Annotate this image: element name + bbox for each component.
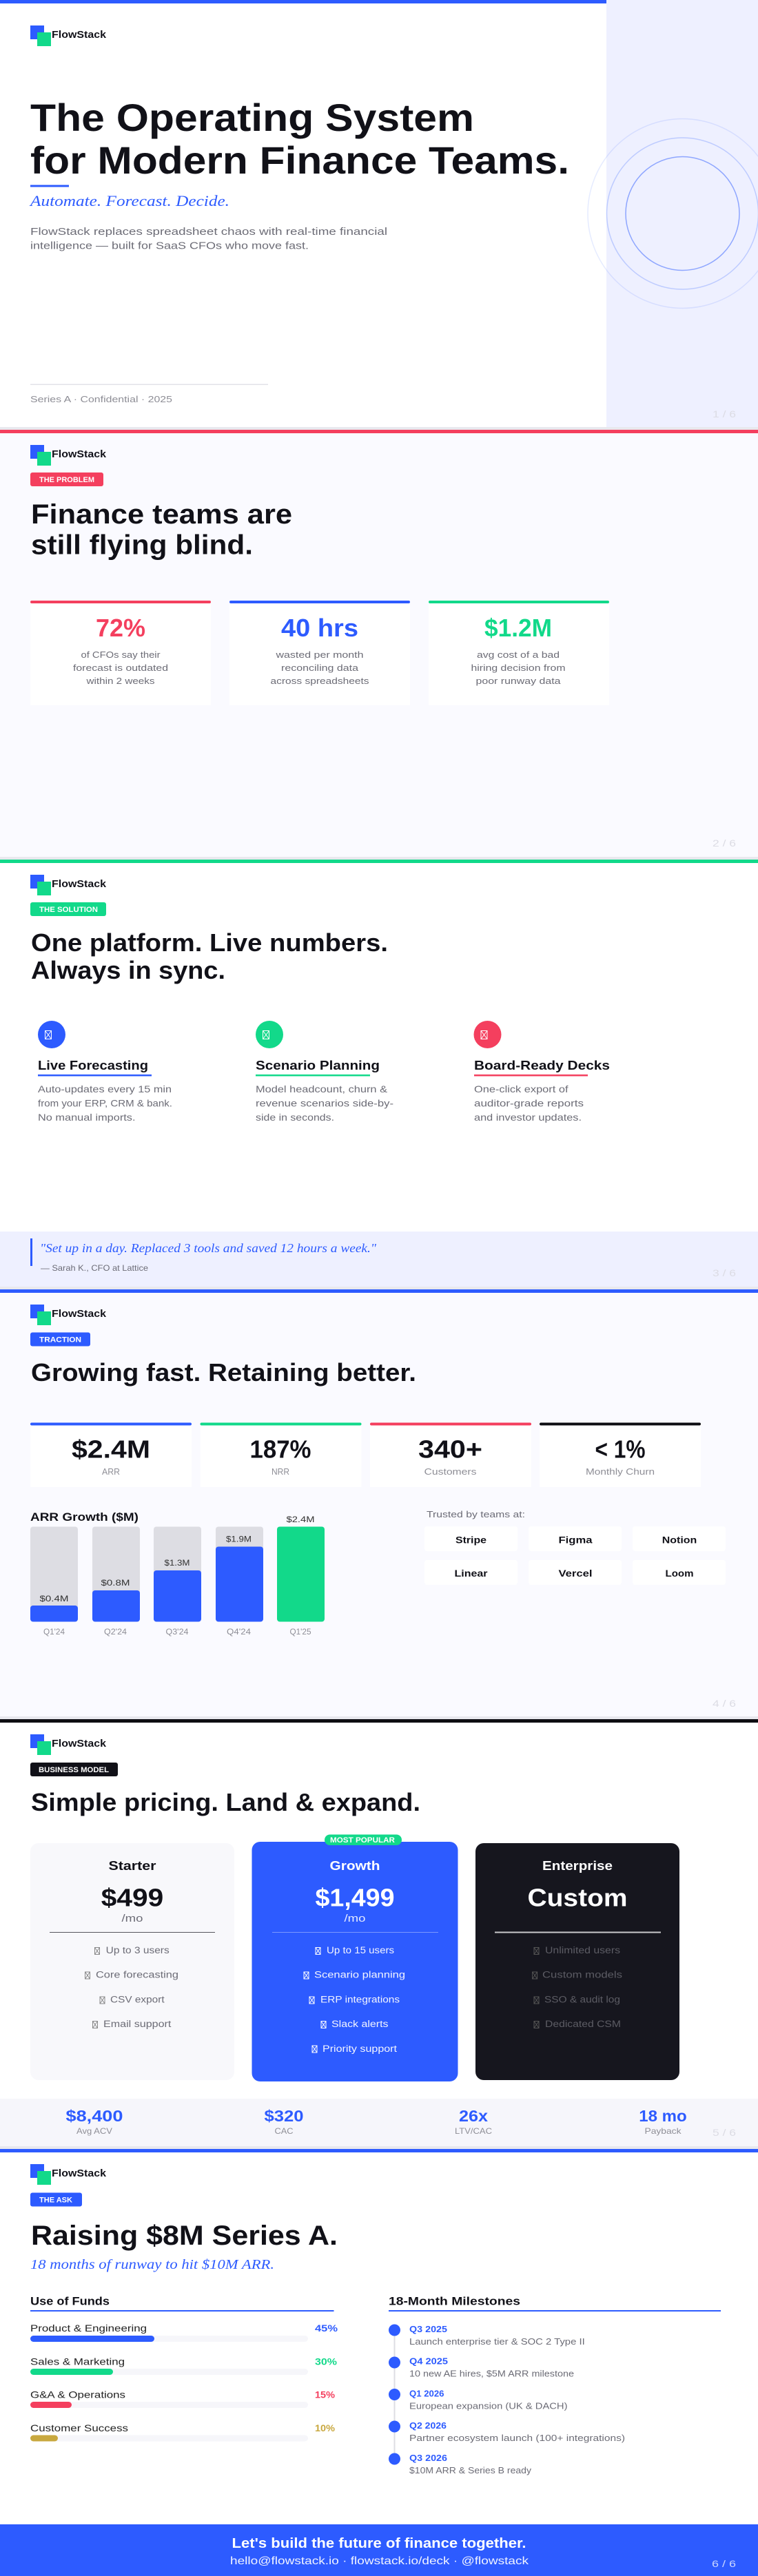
logo tile: Stripe: Stripe	[455, 1535, 486, 1546]
feature: scenario planning	[256, 1021, 393, 1123]
pricing card: starter: Core forecasting	[96, 1970, 178, 1980]
tag	[30, 902, 106, 916]
bar: Q2'24	[92, 1526, 140, 1637]
testimonial band: — Sarah K., CFO at Lattice	[41, 1263, 148, 1273]
feature: live forecasting: from your ERP, CRM & bank.	[38, 1098, 172, 1109]
description	[30, 226, 387, 252]
stat card: $1.2M	[429, 601, 609, 705]
bar: Q4'24: Q4'24	[227, 1627, 251, 1637]
logo: FlowStack	[52, 1308, 107, 1320]
stat card: $1.2M: hiring decision from	[471, 663, 565, 673]
feature: live forecasting: Auto-updates every 15 min	[38, 1083, 172, 1094]
metric: payback: Payback	[645, 2126, 682, 2136]
logo tile: Stripe	[424, 1526, 518, 1551]
feature: scenario planning: Scenario Planning	[256, 1059, 380, 1072]
pricing card: growth: Slack alerts	[331, 2019, 389, 2029]
bar: Q1'25: $2.4M	[287, 1515, 314, 1524]
milestone: Q4 2025: 10 new AE hires, $5M ARR milestone	[409, 2369, 574, 2379]
headline: Finance teams are	[31, 499, 292, 530]
funds row: product and engineering	[30, 2323, 338, 2342]
pricing card: enterprise: Dedicated CSM	[545, 2019, 621, 2029]
stat card: 72%	[30, 601, 211, 705]
description: intelligence — built for SaaS CFOs who move fast.	[30, 240, 309, 252]
logo: FlowStack	[52, 29, 107, 41]
feature: scenario planning: side in seconds.	[256, 1112, 334, 1123]
slide 1: cover	[0, 0, 758, 427]
call to action footer: hello@flowstack.io · flowstack.io/deck · @flowstack	[230, 2555, 529, 2567]
call to action footer	[0, 2524, 758, 2576]
stat card: 40 hrs: across spreadsheets	[270, 676, 369, 686]
pricing card: starter: /mo	[121, 1913, 143, 1924]
pricing card: enterprise: Unlimited users	[545, 1945, 620, 1955]
logo	[30, 1305, 107, 1325]
tag: THE PROBLEM	[39, 476, 94, 484]
bar: Q3'24: $1.3M	[164, 1558, 190, 1568]
tag	[30, 1763, 118, 1776]
pricing card: starter: Email support	[103, 2019, 172, 2029]
KPI card: NRR: NRR	[272, 1466, 289, 1477]
milestone: Q4 2025: Q4 2025	[409, 2356, 448, 2367]
feature: scenario planning: revenue scenarios side-by-	[256, 1098, 393, 1109]
funds row: product and engineering: Product & Engineering	[30, 2323, 147, 2334]
title: for Modern Finance Teams.	[30, 138, 569, 182]
pricing card: enterprise: Custom models	[542, 1970, 622, 1980]
logo: FlowStack	[52, 1738, 107, 1749]
bar: Q2'24: $0.8M	[101, 1578, 130, 1588]
right side panel	[606, 0, 758, 427]
metric: LTV/CAC: 26x	[459, 2107, 488, 2125]
page number: 3 / 6	[713, 1267, 736, 1278]
trusted by label: Trusted by teams at:	[427, 1509, 525, 1519]
stat card: 40 hrs: 40 hrs	[281, 614, 358, 642]
milestone: Q2 2026	[389, 2420, 625, 2453]
funds row: customer success: Customer Success	[30, 2422, 128, 2433]
logo	[30, 875, 107, 895]
funds row: G&A and operations: G&A & Operations	[30, 2389, 125, 2400]
pricing card: starter	[30, 1843, 234, 2080]
tag: BUSINESS MODEL	[39, 1766, 109, 1774]
testimonial band: "Set up in a day. Replaced 3 tools and saved 12 hours a week."	[40, 1241, 376, 1255]
KPI card: customers	[370, 1423, 531, 1487]
page number: 6 / 6	[712, 2558, 736, 2569]
stat card: $1.2M: $1.2M	[484, 614, 552, 642]
pricing card: growth	[252, 1835, 458, 2081]
title: The Operating System	[30, 96, 474, 139]
KPI card: ARR	[30, 1423, 192, 1487]
stat card: 40 hrs: reconciling data	[281, 663, 359, 673]
pricing card: growth: $1,499	[316, 1883, 394, 1912]
milestone: Q1 2026	[389, 2388, 568, 2422]
bar: Q1'24: $0.4M	[40, 1594, 69, 1603]
slide 4: traction	[0, 1289, 758, 1716]
tag	[30, 1332, 90, 1346]
testimonial band	[0, 1232, 758, 1287]
customer logo grid	[424, 1509, 726, 1585]
metric: LTV/CAC: LTV/CAC	[455, 2126, 492, 2136]
stat card: 72%: 72%	[96, 614, 145, 642]
pricing card: enterprise	[475, 1843, 679, 2080]
page number: 2 / 6	[713, 838, 736, 849]
most popular badge	[325, 1835, 402, 1845]
KPI card: customers: Customers	[424, 1466, 477, 1477]
milestone: Q3 2026	[389, 2453, 532, 2475]
KPI card: NRR: 187%	[249, 1435, 311, 1463]
section heading: 18-Month Milestones	[389, 2295, 520, 2307]
tag	[30, 472, 103, 486]
page number: 4 / 6	[713, 1698, 736, 1709]
tag: TRACTION	[39, 1336, 81, 1344]
headline: Always in sync.	[31, 956, 225, 984]
KPI card: ARR: ARR	[102, 1466, 120, 1477]
funds row: G&A and operations	[30, 2389, 336, 2408]
KPI card: customers: 340+	[418, 1435, 482, 1463]
pricing card: enterprise: SSO & audit log	[544, 1995, 620, 2004]
milestone: Q3 2025	[389, 2324, 585, 2357]
logo	[30, 2164, 107, 2185]
page number: 1 / 6	[713, 408, 736, 419]
bar: Q3'24: Q3'24	[165, 1627, 189, 1637]
feature: board-ready decks	[474, 1021, 610, 1123]
logo: FlowStack	[52, 2168, 107, 2179]
metric: payback: 18 mo	[639, 2107, 687, 2125]
funds row: G&A and operations: 15%	[315, 2389, 336, 2400]
pricing card: enterprise: Custom	[528, 1883, 627, 1912]
milestones timeline	[389, 2295, 721, 2475]
chart title: ARR Growth ($M)	[30, 1510, 139, 1524]
bar: Q1'24: Q1'24	[43, 1627, 65, 1637]
metric: LTV/CAC	[455, 2107, 492, 2136]
feature: live forecasting	[38, 1021, 172, 1123]
headline: Simple pricing. Land & expand.	[31, 1788, 420, 1816]
funds row: product and engineering: 45%	[315, 2323, 338, 2334]
feature: live forecasting: Live Forecasting	[38, 1059, 148, 1072]
milestone: Q2 2026: Partner ecosystem launch (100+ integrations)	[409, 2433, 625, 2443]
stat card: 72%: of CFOs say their	[81, 650, 161, 660]
section heading: Use of Funds	[30, 2295, 110, 2307]
feature: board-ready decks: One-click export of	[474, 1083, 568, 1094]
metric: CAC	[265, 2107, 303, 2136]
logo tile: Vercel	[529, 1560, 622, 1585]
feature: board-ready decks: and investor updates.	[474, 1112, 582, 1123]
KPI card: ARR: $2.4M	[72, 1435, 150, 1463]
pricing card: starter: CSV export	[110, 1995, 165, 2004]
headline	[31, 928, 388, 984]
pricing card: starter: Starter	[109, 1859, 156, 1873]
feature: live forecasting: No manual imports.	[38, 1112, 135, 1123]
headline: still flying blind.	[31, 530, 253, 561]
accent line	[30, 185, 69, 187]
logo tile: Linear	[424, 1560, 518, 1585]
milestone: Q1 2026: European expansion (UK & DACH)	[409, 2400, 568, 2411]
bar: Q1'25: Q1'25	[289, 1627, 311, 1637]
pricing card: growth: Up to 15 users	[327, 1945, 394, 1955]
logo tile: Loom	[633, 1560, 726, 1585]
logo: FlowStack	[52, 878, 107, 890]
pricing card: growth: Growth	[329, 1859, 380, 1873]
title	[30, 96, 569, 182]
pricing card: growth: Priority support	[322, 2044, 397, 2054]
footer meta: Series A · Confidential · 2025	[30, 394, 172, 404]
use of funds section	[30, 2295, 338, 2441]
metric: CAC: CAC	[274, 2126, 294, 2136]
feature: board-ready decks: Board-Ready Decks	[474, 1059, 610, 1072]
milestone: Q3 2025: Launch enterprise tier & SOC 2 Type II	[409, 2336, 585, 2347]
logo tile: Notion: Notion	[662, 1535, 697, 1546]
metric: payback	[639, 2107, 687, 2136]
logo tile: Linear: Linear	[455, 1568, 488, 1579]
logo tile: Figma: Figma	[558, 1535, 593, 1546]
pricing card: enterprise: Enterprise	[542, 1859, 613, 1873]
slide 6: the ask	[0, 2149, 758, 2576]
logo tile: Loom: Loom	[666, 1568, 693, 1579]
funds row: customer success: 10%	[315, 2422, 336, 2433]
feature: board-ready decks: auditor-grade reports	[474, 1098, 584, 1109]
stat card: 40 hrs: wasted per month	[275, 650, 364, 660]
pricing card: growth: Scenario planning	[314, 1970, 405, 1980]
tagline: Automate. Forecast. Decide.	[29, 192, 229, 209]
milestone: Q2 2026: Q2 2026	[409, 2420, 447, 2431]
tag: THE SOLUTION	[39, 906, 98, 914]
headline: One platform. Live numbers.	[31, 928, 388, 957]
feature: scenario planning: Model headcount, churn &	[256, 1083, 388, 1094]
stat card: 40 hrs	[229, 601, 410, 705]
concentric circles decoration	[588, 118, 758, 309]
stat card: 72%: within 2 weeks	[85, 676, 155, 686]
metric: ACV	[66, 2107, 123, 2136]
bar: Q3'24	[154, 1526, 201, 1637]
headline: Growing fast. Retaining better.	[31, 1358, 416, 1386]
slide 5: business model	[0, 1719, 758, 2146]
funds row: sales and marketing: 30%	[315, 2356, 338, 2367]
logo	[30, 1734, 107, 1755]
metric: CAC: $320	[265, 2107, 303, 2125]
call to action footer: Let's build the future of finance together.	[232, 2536, 526, 2551]
unit economics band	[0, 2099, 758, 2146]
stat card: $1.2M: poor runway data	[475, 676, 561, 686]
pricing card: growth: ERP integrations	[320, 1995, 400, 2004]
bar: Q2'24: Q2'24	[104, 1627, 127, 1637]
logo tile: Notion	[633, 1526, 726, 1551]
funds row: sales and marketing: Sales & Marketing	[30, 2356, 125, 2367]
bar: Q1'24	[30, 1526, 78, 1637]
subtitle: 18 months of runway to hit $10M ARR.	[30, 2257, 274, 2272]
ARR growth bar chart	[30, 1510, 325, 1637]
slide 3: the solution	[0, 860, 758, 1287]
funds row: sales and marketing	[30, 2356, 338, 2375]
metric: ACV: $8,400	[66, 2107, 123, 2125]
logo: FlowStack	[52, 448, 107, 460]
pricing card: growth: /mo	[345, 1913, 365, 1924]
logo tile: Vercel: Vercel	[558, 1568, 593, 1579]
description: FlowStack replaces spreadsheet chaos with real-time financial	[30, 226, 387, 238]
tag: THE ASK	[39, 2196, 72, 2204]
logo tile: Figma	[529, 1526, 622, 1551]
footer divider	[30, 384, 268, 385]
metric: ACV: Avg ACV	[76, 2126, 112, 2136]
bar: Q4'24	[216, 1526, 263, 1637]
pricing card: starter: $499	[101, 1883, 163, 1912]
logo	[30, 25, 107, 46]
KPI card: churn: < 1%	[595, 1435, 645, 1463]
slide 2: the problem	[0, 430, 758, 857]
tag	[30, 2193, 82, 2207]
headline	[31, 499, 292, 561]
KPI card: churn	[540, 1423, 701, 1487]
stat card: $1.2M: avg cost of a bad	[477, 650, 560, 660]
milestone: Q3 2026: $10M ARR & Series B ready	[409, 2465, 532, 2475]
funds row: customer success	[30, 2422, 336, 2441]
bar: Q4'24: $1.9M	[226, 1535, 252, 1544]
milestone: Q3 2025: Q3 2025	[409, 2324, 447, 2334]
page number: 5 / 6	[713, 2127, 736, 2138]
milestone: Q3 2026: Q3 2026	[409, 2453, 447, 2463]
bar: Q1'25	[277, 1515, 325, 1637]
headline: Raising $8M Series A.	[31, 2221, 338, 2251]
pricing card: starter: Up to 3 users	[106, 1945, 170, 1955]
most popular badge: MOST POPULAR	[330, 1836, 395, 1845]
KPI card: NRR	[200, 1423, 361, 1487]
KPI card: churn: Monthly Churn	[586, 1466, 655, 1477]
logo	[30, 445, 107, 466]
milestone: Q1 2026: Q1 2026	[409, 2388, 444, 2398]
stat card: 72%: forecast is outdated	[73, 663, 168, 673]
milestone: Q4 2025	[389, 2356, 574, 2389]
